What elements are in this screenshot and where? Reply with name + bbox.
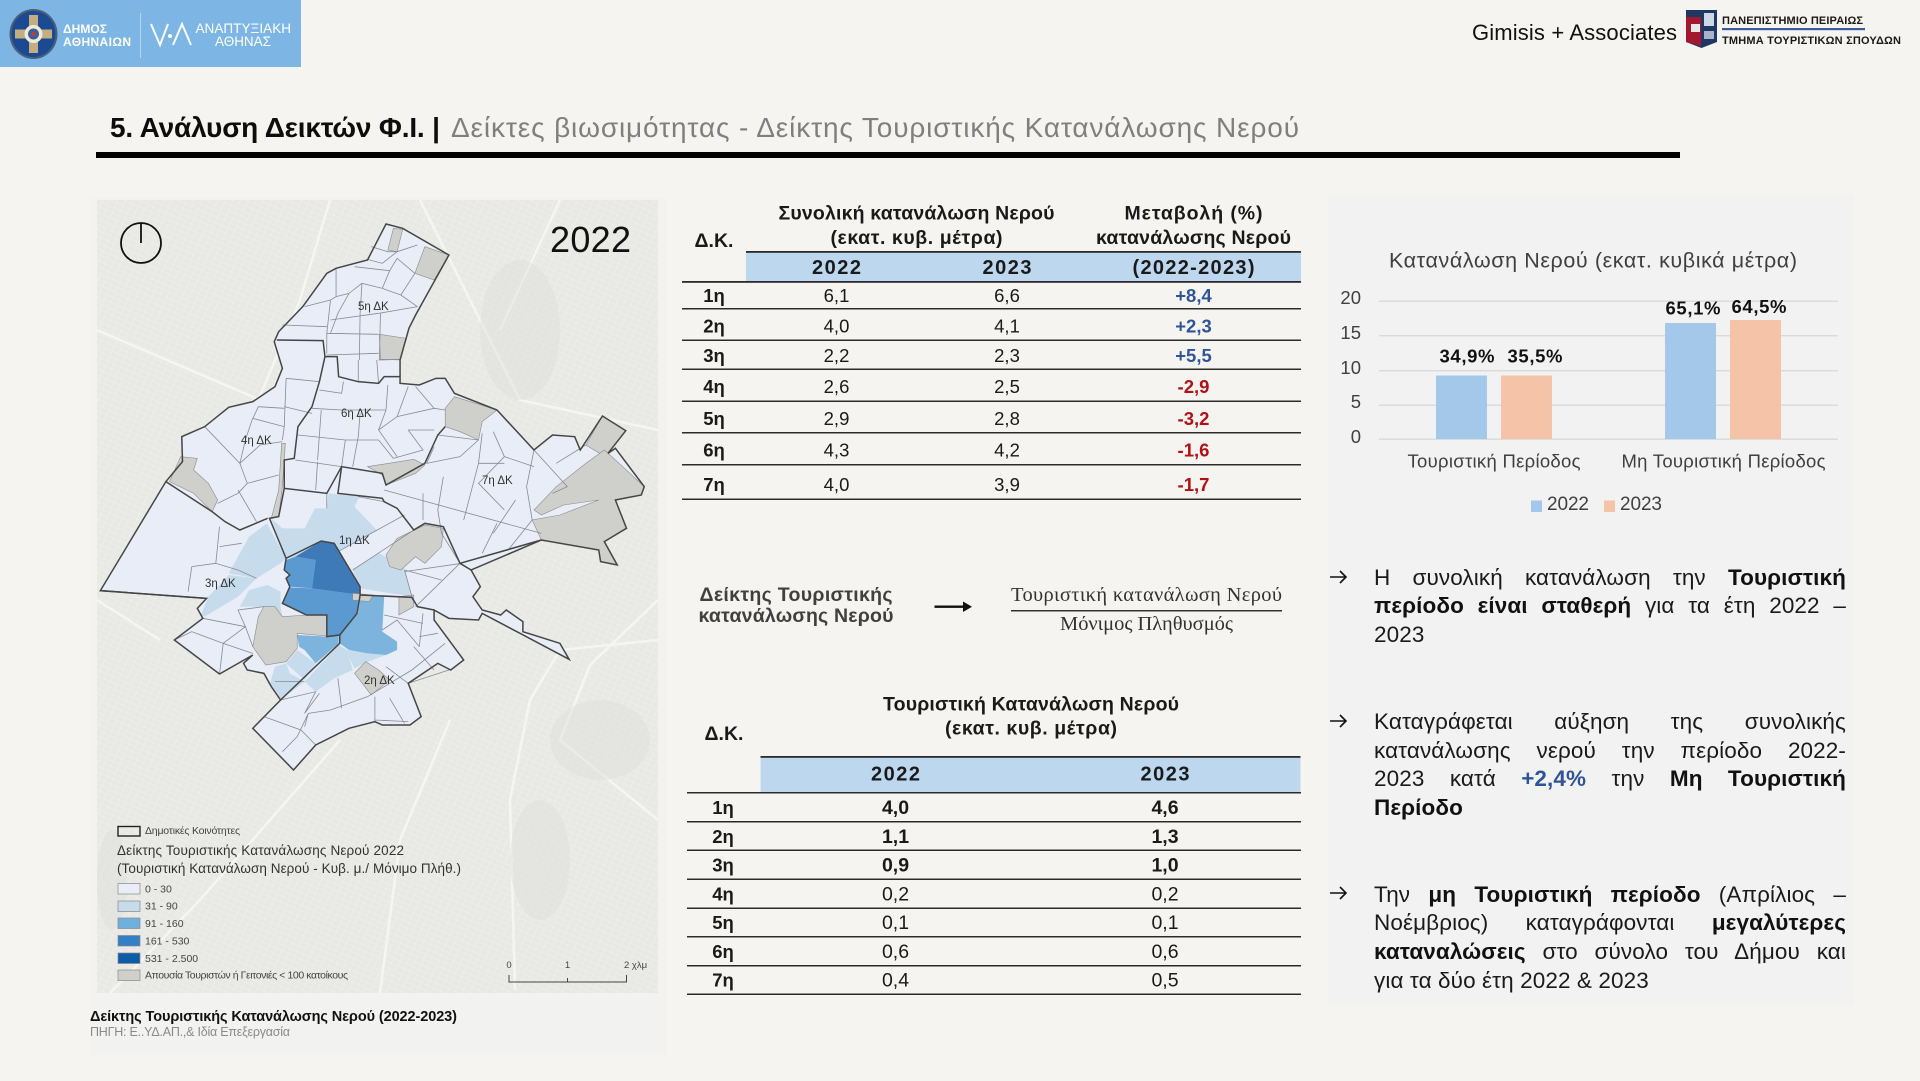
row: 2η: 2η (703, 316, 725, 336)
chart legend: 2022 (1547, 494, 1589, 515)
map legend (117, 825, 461, 982)
map: grey areas with no tourists (170, 228, 644, 695)
map labels: district communities: 5η ΔΚ (358, 301, 389, 313)
chart title: Κατανάλωση Νερού (εκατ. κυβικά μέτρα) (1389, 248, 1797, 272)
row: 1η (712, 797, 1179, 819)
row: 3η: 3η (703, 345, 725, 366)
row: 3η: 2,2 (824, 345, 849, 366)
map caption: ΠΗΓΗ: Ε..ΥΔ.ΑΠ.,& Ιδία Επεξεργασία (90, 1025, 290, 1039)
formula label: Δείκτης Τουριστικής (700, 584, 892, 606)
icon: municipality emblem (10, 9, 58, 59)
university text: ΠΑΝΕΠΙΣΤΗΜΙΟ ΠΕΙΡΑΙΩΣ (1722, 15, 1863, 27)
row: 6η: -1,6 (1178, 440, 1209, 460)
text block: bullet 2: Καταγράφεται αύξηση της συνολικής (1374, 709, 1846, 734)
map labels: district communities: 4η ΔΚ (241, 435, 272, 447)
table lines (687, 756, 1301, 995)
map labels: district communities: 1η ΔΚ (339, 535, 370, 547)
row: 5η: 2,8 (994, 408, 1020, 429)
icon: bullet arrow 2 (1330, 715, 1346, 727)
row: 4η (712, 884, 1179, 906)
row: 5η (712, 912, 1179, 934)
row: 4η: 4η (712, 884, 734, 904)
row: 5η: 0,1 (1151, 912, 1179, 934)
row: 1η: 1η (703, 285, 725, 306)
map labels: district communities: 6η ΔΚ (341, 408, 372, 420)
row: 1η (703, 285, 1212, 306)
map: neighbourhood boundaries (174, 245, 586, 752)
icon: north arrow (121, 223, 161, 263)
category labels: Μη Τουριστική Περίοδος (1622, 450, 1826, 472)
row: 4η: 4η (703, 376, 725, 397)
row: 3η: 2,3 (994, 345, 1020, 366)
row: 7η: 7η (712, 970, 734, 990)
text block: bullet 3: Την μη Τουριστική περίοδο (Απρίλιος – (1374, 882, 1846, 906)
row: 3η: +5,5 (1175, 345, 1212, 366)
map legend: Απουσία Τουριστών ή Γειτονιές < 100 κατοίκους (145, 970, 348, 982)
category labels: Τουριστική Περίοδος (1408, 450, 1581, 472)
table: total water consumption (682, 202, 1301, 500)
text block: bullet 1: περίοδο είναι σταθερή για τα έτη 2022 – (1374, 593, 1846, 618)
bar value labels: 65,1% (1666, 298, 1720, 318)
formula fraction (1011, 584, 1282, 635)
row: 3η: 3η (712, 854, 734, 876)
row: 2η: 1,1 (882, 826, 909, 848)
map scale bar: 2 χλμ (624, 960, 647, 971)
row: 7η (712, 970, 1179, 992)
row: 7η: 7η (703, 474, 725, 495)
logo mark: V·Λ (151, 24, 191, 45)
map: class 531-2500 area (295, 541, 360, 595)
table header: 2023 (1140, 764, 1190, 786)
map legend: 0 - 30 (145, 884, 172, 896)
title: 5. Ανάλυση Δεικτών Φ.Ι. | (110, 112, 440, 143)
text block: bullet 2 (1374, 709, 1846, 820)
table header: 2023 (982, 257, 1032, 279)
y axis labels: 10 (1340, 357, 1361, 378)
formula label: κατανάλωσης Νερού (698, 605, 894, 627)
logo banner: Municipality of Athens and Development Agency (0, 0, 301, 67)
map scale bar (506, 960, 647, 982)
table header (695, 202, 1291, 279)
row: 2η: 1,3 (1151, 826, 1179, 848)
logo text: development agency: ΑΝΑΠΤΥΞΙΑΚΗ (196, 21, 291, 36)
text block: bullet 3 (1374, 882, 1846, 993)
row: 4η: 0,2 (882, 884, 909, 906)
chart grid lines (1379, 300, 1838, 440)
text block: bullet 2: Περίοδο (1374, 795, 1463, 820)
row: 7η: 0,5 (1151, 970, 1179, 992)
row: 7η (703, 474, 1209, 495)
row: 5η: 5η (712, 912, 734, 933)
map year label: 2022 (550, 219, 631, 260)
chart legend: 2023 (1620, 494, 1662, 515)
row: 3η (703, 345, 1212, 366)
text block: bullet 2: κατανάλωσης νερού την περίοδο 2022- (1374, 738, 1846, 763)
indicator formula (698, 584, 1282, 635)
bar value labels (1440, 296, 1786, 366)
university text: ΤΜΗΜΑ ΤΟΥΡΙΣΤΙΚΩΝ ΣΠΟΥΔΩΝ (1722, 35, 1901, 47)
map scale bar: 0 (506, 960, 512, 971)
table header: κατανάλωσης Νερού (1096, 227, 1291, 249)
text block: bullet 1: Η συνολική κατανάλωση την Τουριστική (1374, 565, 1846, 590)
map caption (90, 1009, 457, 1039)
formula label (698, 584, 894, 627)
row: 5η: -3,2 (1178, 408, 1209, 429)
y axis labels (1340, 287, 1361, 447)
y axis labels: 5 (1351, 391, 1361, 412)
map legend: 91 - 160 (145, 918, 184, 930)
map legend: 31 - 90 (145, 900, 178, 912)
map base polygon (100, 224, 644, 770)
text block: bullet 2: 2023 κατά +2,4% την Μη Τουριστική (1374, 766, 1846, 791)
table header: (εκατ. κυβ. μέτρα) (830, 227, 1002, 249)
row: 7η: -1,7 (1178, 474, 1209, 495)
row: 1η: 1η (712, 797, 734, 818)
university text (1722, 15, 1901, 47)
row: 7η: 3,9 (994, 474, 1020, 495)
row: 5η: 5η (703, 408, 725, 429)
row: 1η: 6,6 (994, 285, 1020, 306)
bar value labels: 35,5% (1508, 346, 1562, 366)
row: 4η: -2,9 (1178, 376, 1209, 397)
row: 6η: 0,6 (1151, 941, 1179, 963)
row: 3η: 0,9 (882, 854, 909, 876)
row: 2η (712, 826, 1179, 848)
map labels: district communities: 3η ΔΚ (205, 578, 236, 590)
y axis labels: 15 (1340, 322, 1361, 343)
row: 5η: 0,1 (882, 912, 909, 934)
bar value labels: 34,9% (1440, 346, 1494, 366)
icon: University of Piraeus shield (1686, 10, 1717, 48)
map legend: 161 - 530 (145, 936, 190, 948)
logo text: development agency (196, 21, 291, 49)
map caption: Δείκτης Τουριστικής Κατανάλωσης Νερού (2022-2023) (90, 1009, 457, 1025)
logo text: municipality: ΑΘΗΝΑΙΩΝ (63, 35, 131, 49)
row: 4η (703, 376, 1209, 397)
bars: non-tourist period (1665, 320, 1781, 439)
map scale bar: 1 (565, 960, 570, 971)
y axis labels: 20 (1340, 287, 1361, 308)
row: 3η (712, 854, 1179, 876)
table header: Δ.Κ. (695, 230, 733, 252)
map: choropleth of municipal neighbourhoods (100, 224, 644, 770)
logo text: municipality (63, 22, 131, 49)
map: district community borders (100, 224, 644, 770)
bar chart: water consumption (1340, 248, 1838, 515)
row: 1η: +8,4 (1175, 285, 1212, 306)
text block: bullet 1: 2023 (1374, 622, 1424, 647)
table lines (682, 251, 1301, 500)
formula fraction: Τουριστική κατανάλωση Νερού (1011, 584, 1282, 606)
row: 6η: 0,6 (882, 941, 909, 963)
row: 6η: 6η (712, 941, 734, 962)
map basemap (97, 200, 658, 993)
arrow: formula (934, 602, 972, 612)
row: 7η: 0,4 (882, 970, 909, 992)
text block: bullet 1 (1374, 565, 1846, 647)
y axis labels: 0 (1351, 426, 1361, 447)
table: tourist water consumption (687, 694, 1301, 995)
logo text: development agency: ΑΘΗΝΑΣ (215, 34, 271, 49)
row: 2η: 2η (712, 826, 734, 847)
bar value labels: 64,5% (1732, 296, 1786, 317)
row: 4η: 2,6 (824, 376, 849, 397)
map labels: district communities: 2η ΔΚ (364, 675, 395, 687)
panel: right column (1328, 195, 1854, 1005)
row: 5η: 2,9 (824, 408, 849, 429)
bars: tourist period (1436, 376, 1552, 439)
icon: bullet arrow 1 (1330, 571, 1346, 583)
panel: map (90, 198, 666, 1055)
table header: 2022 (871, 764, 920, 786)
row: 2η (703, 316, 1212, 336)
logo text: municipality: ΔΗΜΟΣ (63, 22, 107, 36)
text block: bullet 3: Νοέμβριος) καταγράφονται μεγαλύτερες (1374, 910, 1846, 935)
table header (705, 694, 1190, 786)
map legend: Δείκτης Τουριστικής Κατανάλωσης Νερού 2022 (117, 843, 404, 858)
chart legend (1531, 494, 1662, 515)
title rule (96, 152, 1680, 158)
table header: Τουριστική Κατανάλωση Νερού (883, 694, 1179, 716)
row: 6η: 4,2 (994, 440, 1020, 460)
row: 6η (703, 440, 1209, 460)
row: 4η: 0,2 (1151, 884, 1179, 906)
row: 2η: 4,1 (994, 316, 1020, 336)
formula fraction: Μόνιμος Πληθυσμός (1060, 613, 1233, 635)
row: 4η: 2,5 (994, 376, 1020, 397)
table header: Συνολική κατανάλωση Νερού (778, 202, 1054, 224)
map labels: district communities: 7η ΔΚ (482, 475, 513, 487)
table header: Μεταβολή (%) (1124, 202, 1262, 224)
map legend: Δημοτικές Κοινότητες (145, 825, 240, 837)
table header: Δ.Κ. (705, 723, 743, 745)
row: 6η: 4,3 (824, 440, 849, 460)
title: Δείκτες βιωσιμότητας - Δείκτης Τουριστικής Κατανάλωσης Νερού (451, 112, 1299, 143)
category labels (1408, 450, 1826, 472)
text block: bullet 3: για τα δύο έτη 2022 & 2023 (1374, 968, 1649, 993)
text block: bullet 3: καταναλώσεις στο σύνολο του Δήμου και (1374, 939, 1846, 964)
map: class 91-160 areas (297, 595, 397, 663)
table header: (2022-2023) (1132, 257, 1254, 279)
row: 7η: 4,0 (824, 474, 849, 495)
row: 2η: 4,0 (824, 316, 849, 336)
row: 6η: 6η (703, 440, 725, 460)
row: 3η: 1,0 (1151, 854, 1179, 876)
row: 1η: 4,6 (1151, 797, 1179, 819)
map legend: 531 - 2.500 (145, 953, 198, 965)
map: class 31-90 areas (201, 493, 412, 700)
table header: (εκατ. κυβ. μέτρα) (945, 718, 1117, 740)
map: class 161-530 areas (282, 557, 360, 637)
row: 2η: +2,3 (1175, 316, 1212, 336)
row: 1η: 4,0 (882, 797, 909, 819)
map legend: (Τουριστική Κατανάλωση Νερού - Κυβ. μ./ Μόνιμο Πλήθ.) (117, 861, 461, 876)
row: 5η (703, 408, 1209, 429)
map labels: district communities (205, 301, 513, 687)
table header: 2022 (812, 257, 861, 279)
row: 1η: 6,1 (824, 285, 849, 306)
row: 6η (712, 941, 1179, 963)
header right: consultancy name: Gimisis + Associates (1472, 20, 1677, 45)
icon: bullet arrow 3 (1330, 887, 1346, 899)
